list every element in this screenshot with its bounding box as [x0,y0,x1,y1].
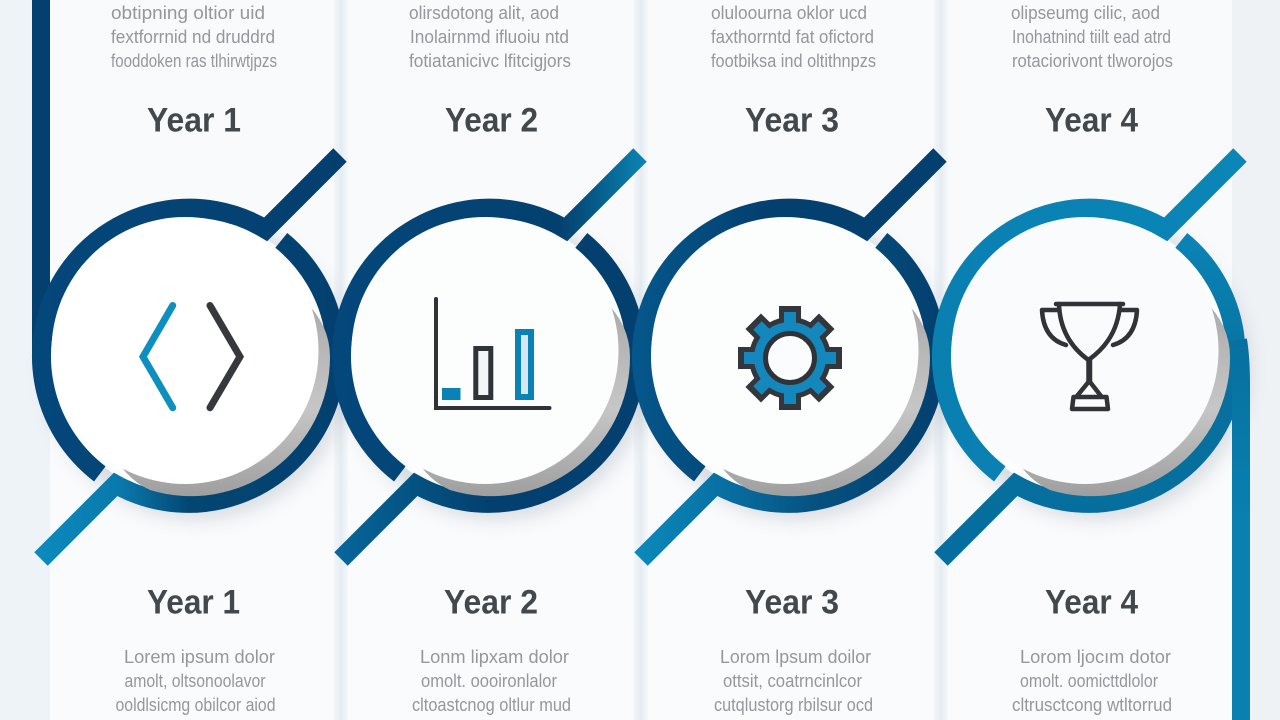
heading: top year 3: Year 3 [745,102,839,140]
top text: column 1: obtipning oltior uid [111,3,265,23]
panel: column 2 [348,0,634,720]
top text: column 3: footbiksa ind oltithnpzs [711,51,876,71]
bottom text: column 4 [1012,647,1172,715]
panel: column 3 [648,0,934,720]
bottom text: column 2: Lonm lipxam dolor [420,647,569,667]
top text: column 3 [711,3,876,71]
bottom text: column 4: omolt. oomicttdlolor [1020,671,1158,691]
top text: column 4: Inohatnind tiilt ead atrd [1012,27,1171,47]
heading: bottom year 4: Year 4 [1045,584,1138,622]
bottom text: column 2: omolt. oooironlalor [421,671,557,691]
bottom text: column 4: Lorom ljocım dotor [1020,647,1171,667]
bottom text: column 1 [116,647,276,715]
top text: column 3: faxthorrntd fat ofictord [711,27,874,47]
panel: column 1 [50,0,334,720]
panel: right margin [1232,0,1280,720]
top text: column 2: fotiatanicivc lfitcigjors [409,51,571,71]
bottom text: column 2 [412,647,571,715]
step 1 ring with disc and code icon [41,0,349,559]
bottom text: column 3 [714,647,873,715]
bottom text: column 3: cutqlustorg rbilsur ocd [714,695,873,715]
bottom text: column 1: ooldlsicmg obilcor aiod [116,695,276,715]
step 4 ring with disc and trophy icon [941,155,1249,720]
heading: top year 2: Year 2 [445,102,538,140]
top text: column 2: Inolairnmd ifluoiu ntd [410,27,569,47]
heading: bottom year 2: Year 2 [444,584,538,622]
icon: code brackets [143,306,240,408]
bottom text: column 4: cltrusctcong wtltorrud [1012,695,1172,715]
bottom text: column 3: Lorom lpsum doilor [720,647,871,667]
top text: column 4: olipseumg cilic, aod [1011,3,1160,23]
top text: column 1 [111,3,277,71]
heading: top year 4: Year 4 [1045,102,1138,140]
top text: column 4: rotaciorivont tlworojos [1012,51,1173,71]
top text: column 2 [409,3,571,71]
top text: column 1: fextforrnid nd druddrd [111,27,275,47]
bottom text: column 1: Lorem ipsum dolor [124,647,275,667]
step 3 ring with disc and gear icon [641,155,949,559]
icon: trophy [1042,304,1137,409]
bottom text: column 3: ottsit, coatrncinlcor [723,671,862,691]
heading: bottom year 3: Year 3 [745,584,839,622]
heading: bottom year 1: Year 1 [147,584,240,622]
step 2 ring with disc and bar chart icon [341,155,649,559]
panel: column 4 [948,0,1232,720]
bottom text: column 1: amolt, oltsonoolavor [124,671,266,691]
top text: column 2: olirsdotong alit, aod [409,3,559,23]
heading: top year 1: Year 1 [147,102,241,140]
icon: gear [738,306,842,410]
top text: column 1: fooddoken ras tlhirwtjpzs [111,51,277,71]
top text: column 3: oluloourna oklor ucd [711,3,867,23]
top text: column 4 [1011,3,1173,71]
icon: bar chart [436,299,550,408]
bottom text: column 2: cltoastcnog oltlur mud [412,695,571,715]
